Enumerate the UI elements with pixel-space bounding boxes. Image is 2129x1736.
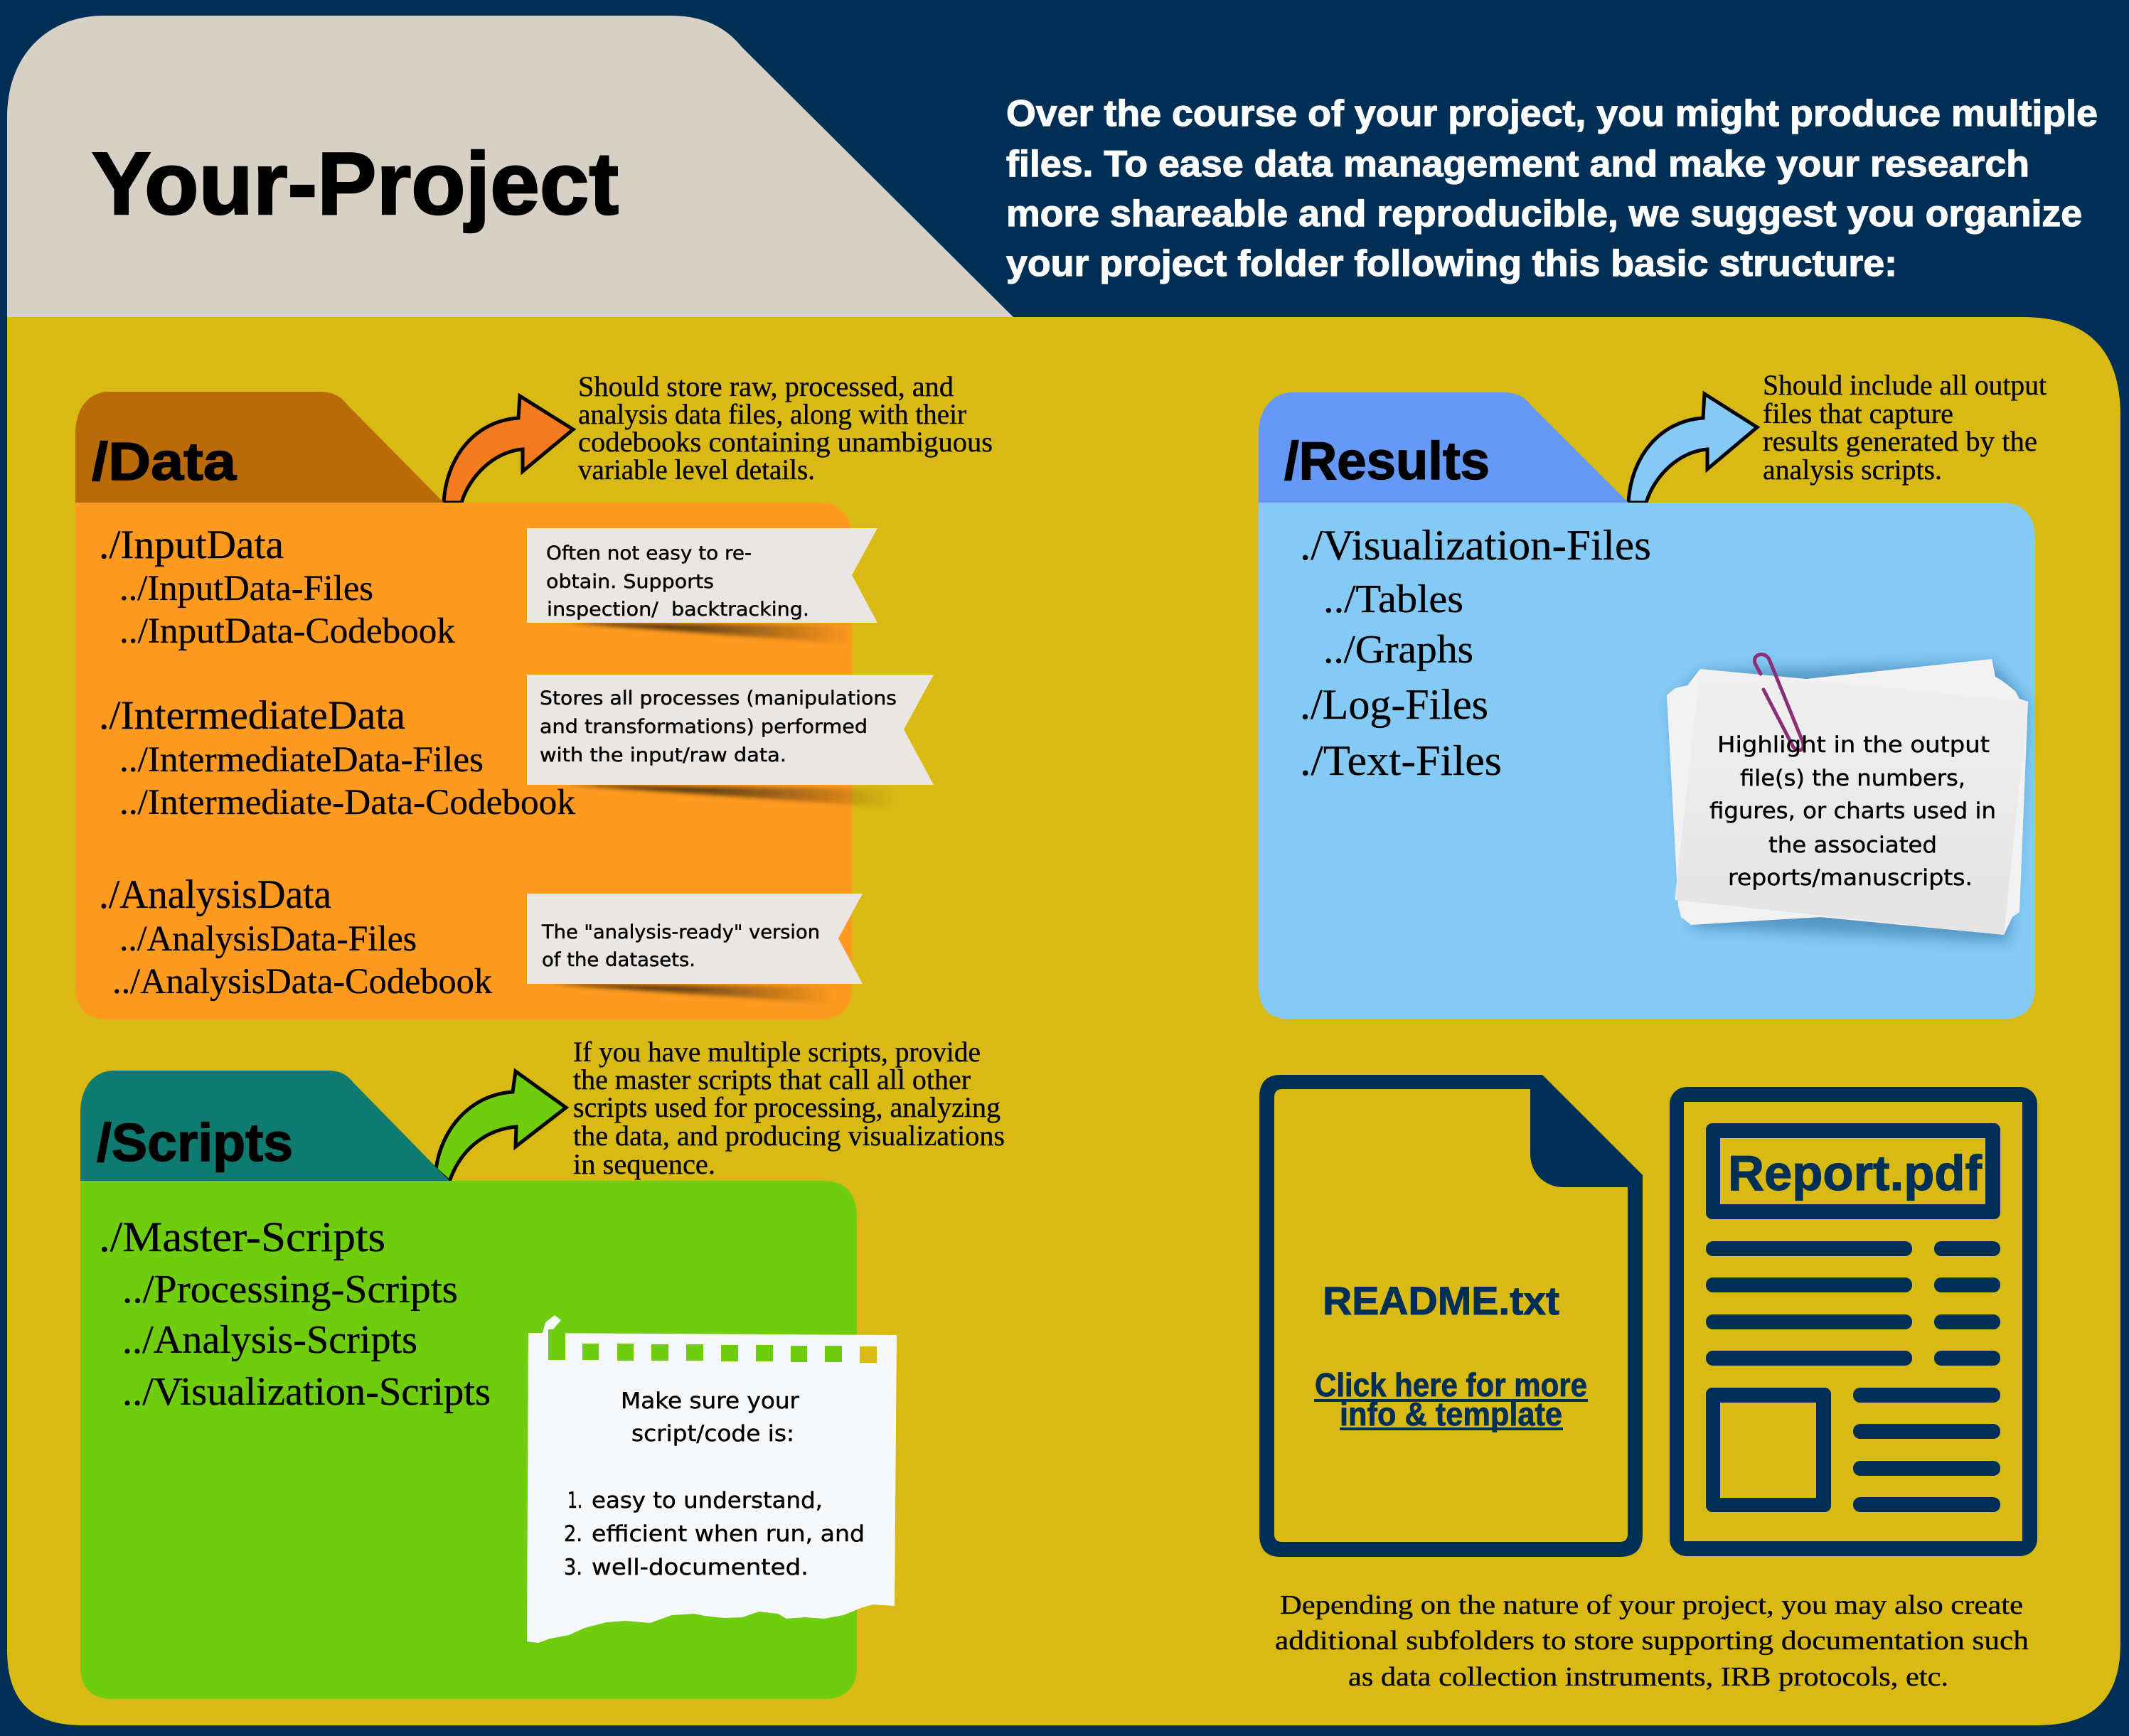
results folder tab <box>1259 392 1628 503</box>
paper stack note: reports/manuscripts. <box>1728 865 1973 891</box>
report title box: Report.pdf <box>1728 1145 1983 1201</box>
ribbon: analysis data <box>527 894 863 1004</box>
intro text <box>1006 93 2098 284</box>
ribbon: input data: obtain. Supports <box>546 571 714 593</box>
ribbon: intermediate data: with the input/raw data. <box>540 744 786 766</box>
scripts folder tab <box>80 1071 449 1181</box>
note text: 2. <box>564 1521 582 1547</box>
data folder list: ./AnalysisData <box>99 872 331 917</box>
scripts folder list: ../Processing-Scripts <box>122 1268 458 1312</box>
data annotation: variable level details. <box>578 454 815 486</box>
footer note <box>1275 1590 2029 1692</box>
ribbon: input data: Often not easy to re- <box>546 542 752 564</box>
data folder tab <box>75 392 444 503</box>
scripts folder list: ../Analysis-Scripts <box>122 1318 417 1362</box>
data folder list <box>99 523 575 1002</box>
results folder body <box>1259 503 2035 1019</box>
readme link: Click here for more <box>1315 1366 1587 1403</box>
note text: script/code is: <box>631 1421 794 1447</box>
scripts annotation <box>573 1036 1005 1180</box>
results folder list: ./Text-Files <box>1300 737 1502 784</box>
data folder list: ../IntermediateData-Files <box>119 740 484 780</box>
paper stack note: figures, or charts used in <box>1709 798 1996 824</box>
results annotation <box>1763 369 2047 486</box>
data annotation: analysis data files, along with their <box>578 398 966 430</box>
scripts annotation: the master scripts that call all other <box>573 1063 971 1095</box>
data folder list: ./InputData <box>99 523 284 567</box>
footer note: additional subfolders to store supporting documentation such <box>1275 1626 2029 1656</box>
paper stack note: file(s) the numbers, <box>1740 766 1965 791</box>
results annotation: results generated by the <box>1763 425 2037 457</box>
paper stack note: Highlight in the output <box>1717 732 1990 758</box>
note text: efficient when run, and <box>592 1521 865 1547</box>
data arrow <box>444 396 573 503</box>
results annotation: Should include all output <box>1763 369 2047 401</box>
icon: report document <box>1670 1087 2037 1556</box>
title: Your-Project <box>92 135 619 233</box>
footer note: as data collection instruments, IRB protocols, etc. <box>1348 1662 1948 1692</box>
ribbon: intermediate data: and transformations) performed <box>540 716 868 738</box>
scripts folder list: ./Master-Scripts <box>99 1213 385 1260</box>
scripts folder list <box>99 1213 491 1414</box>
results folder list: ../Tables <box>1323 577 1463 621</box>
ribbon: input data: inspection/ backtracking. <box>547 599 809 621</box>
data annotation: codebooks containing unambiguous <box>578 426 993 458</box>
notebook holes <box>548 1329 877 1363</box>
data folder list: ../AnalysisData-Files <box>119 919 417 959</box>
readme link <box>1314 1366 1588 1432</box>
readme link: info & template <box>1340 1395 1562 1432</box>
scripts annotation: If you have multiple scripts, provide <box>573 1036 981 1068</box>
report image box <box>1706 1388 1831 1512</box>
intro text: files. To ease data management and make your research <box>1006 144 2029 185</box>
footer note: Depending on the nature of your project, you may also create <box>1280 1590 2023 1620</box>
scripts folder body <box>80 1181 857 1699</box>
ribbon: analysis data: The "analysis-ready" version <box>541 921 820 943</box>
intro text: Over the course of your project, you might produce multiple <box>1006 93 2098 134</box>
data folder list: ../InputData-Files <box>119 569 373 609</box>
report title box <box>1706 1123 2000 1219</box>
results folder list <box>1300 522 1651 784</box>
ribbon: analysis data: of the datasets. <box>542 949 695 971</box>
note text: 1. <box>567 1488 582 1513</box>
panel: scripts <box>80 1036 1005 1699</box>
paper stack note: the associated <box>1768 832 1937 858</box>
paperclip <box>1754 655 1803 750</box>
data folder list: ../AnalysisData-Codebook <box>112 962 492 1002</box>
data folder list: ../InputData-Codebook <box>119 611 455 651</box>
note text: well-documented. <box>592 1555 809 1580</box>
results folder list: ./Log-Files <box>1300 681 1488 728</box>
paper stack callout <box>1667 655 2028 942</box>
paper stack note <box>1709 732 1996 891</box>
torn notebook note <box>527 1315 897 1643</box>
readme label: README.txt <box>1323 1278 1559 1323</box>
data folder body <box>75 503 852 1019</box>
data folder list: ./IntermediateData <box>99 693 405 738</box>
panel: data <box>75 370 993 1019</box>
ribbon: intermediate data <box>527 675 934 808</box>
results annotation: analysis scripts. <box>1763 454 1942 486</box>
scripts folder list: ../Visualization-Scripts <box>122 1370 491 1414</box>
scripts heading: /Scripts <box>97 1113 293 1172</box>
report text lines <box>1706 1241 2000 1512</box>
scripts arrow <box>436 1071 566 1182</box>
data heading: /Data <box>92 432 237 491</box>
ribbon: intermediate data: Stores all processes (manipulations <box>540 687 897 709</box>
ribbon: input data <box>527 528 877 644</box>
intro text: your project folder following this basic structure: <box>1006 243 1897 284</box>
results folder list: ./Visualization-Files <box>1300 522 1651 569</box>
results folder list: ../Graphs <box>1323 628 1473 672</box>
note text <box>564 1388 865 1580</box>
title tab <box>7 16 1013 317</box>
panel: results <box>1259 369 2047 1019</box>
intro text: more shareable and reproducible, we suggest you organize <box>1006 193 2082 235</box>
icon: readme document <box>1259 1075 1643 1557</box>
results arrow <box>1628 394 1757 503</box>
data folder list: ../Intermediate-Data-Codebook <box>119 783 575 823</box>
scripts annotation: scripts used for processing, analyzing <box>573 1091 1001 1123</box>
note text: easy to understand, <box>592 1488 823 1513</box>
note text: 3. <box>564 1555 582 1580</box>
note text: Make sure your <box>621 1388 799 1414</box>
results annotation: files that capture <box>1763 397 1953 429</box>
results heading: /Results <box>1284 431 1490 491</box>
data annotation <box>578 370 993 486</box>
scripts annotation: in sequence. <box>573 1148 715 1180</box>
data annotation: Should store raw, processed, and <box>578 370 954 402</box>
scripts annotation: the data, and producing visualizations <box>573 1120 1005 1152</box>
